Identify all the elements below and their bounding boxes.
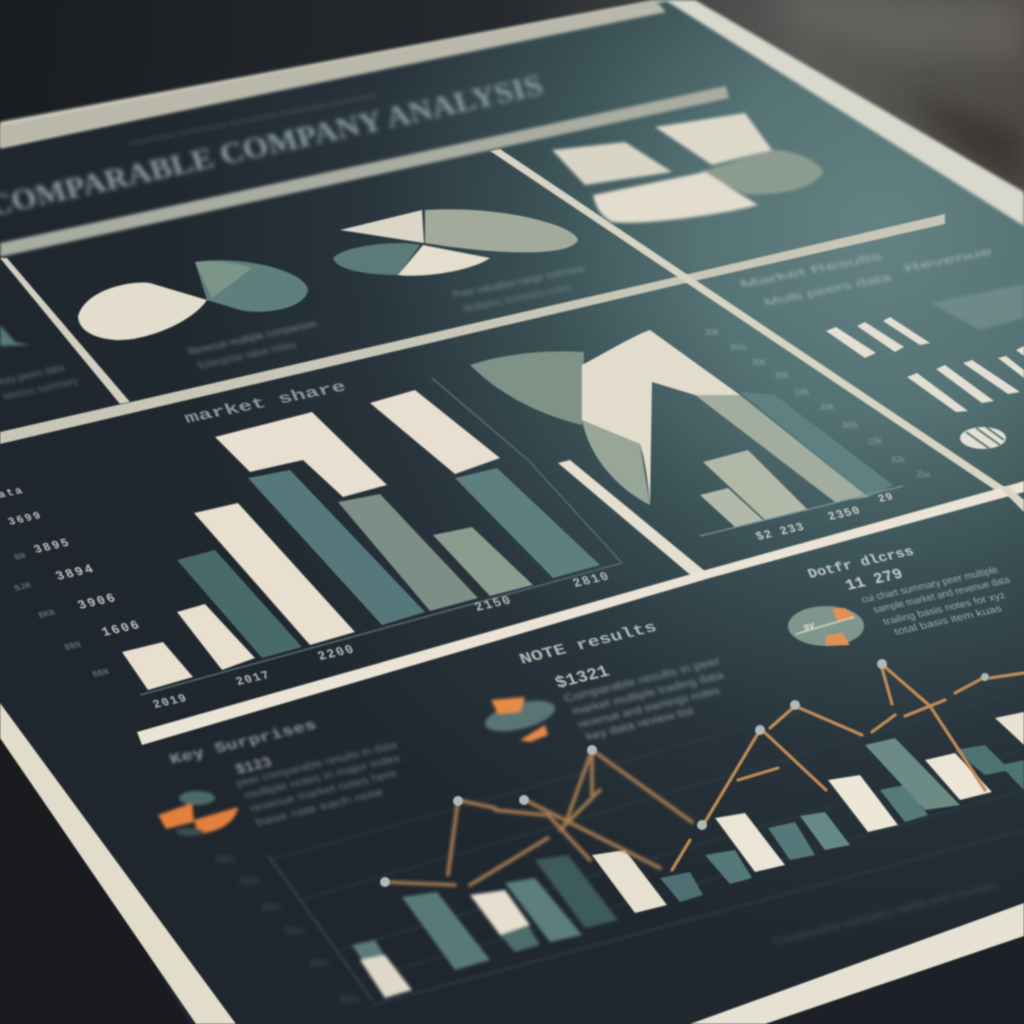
diagonal axis labels: 30% [730,343,746,352]
paragraph: key data review list [584,706,696,743]
y axis labels: 1606 [99,617,144,640]
x axis labels: 2019 [151,691,191,712]
value: $123 [234,755,275,779]
icon: sage orange badge right [788,606,864,646]
gridlines [270,650,1024,980]
diagonal axis labels: Zxx [917,470,930,479]
heading: Key Surprises [168,718,320,769]
panel: left pie chart: Enterprise value notes [196,340,298,372]
line series [380,659,1024,887]
stat text rows: Multi peers data [762,272,895,309]
panel: key results heading and text [517,619,727,743]
chart value labels: $2 233 [754,520,808,544]
stat text rows: Market Results [738,251,885,291]
diagonal axis labels: 30% [842,421,858,430]
diagonal axis labels: 10K [795,388,810,397]
axis [268,855,372,1000]
y axis labels: BBN [63,640,83,653]
bars [122,390,600,690]
axis labels: BBN [240,876,259,886]
y axis labels [0,485,144,680]
y axis labels: 3895 [32,536,73,557]
icon: striped circle [960,427,1006,449]
axis labels [216,854,359,1004]
panel: area and arch chart [470,328,930,544]
axis [140,378,622,695]
panel: combined bar and line chart [216,650,1024,1005]
heading: key results: NOTE results [517,619,660,669]
stat text rows: Revenue [902,246,995,275]
y axis labels: BBN [91,667,111,680]
y axis labels: BN [13,551,28,563]
panel: top right pie chart [552,113,823,223]
icon: orange badge left [158,791,238,836]
x axis labels [151,569,613,712]
y axis labels: 3894 [53,561,98,584]
axis labels: BBN [340,994,359,1004]
paragraph: market multiple trading data [570,669,727,718]
y axis labels: 3699 [6,510,45,529]
paragraph: total basis item kuas [892,604,1004,638]
chart value labels [754,491,897,544]
nodes [380,659,989,887]
panel: left pie chart: Revenue multiple comparison [186,319,319,358]
diagonal axis labels: 30K [752,358,767,367]
x axis labels: 2810 [570,569,613,591]
panel: far left sliver: Metrics summary [1,376,80,403]
value: $1321 [552,662,613,693]
x axis labels: 2017 [234,668,274,689]
axis labels: BBN [310,958,329,968]
panel: profit drivers text [806,544,1013,638]
paragraph [562,655,727,743]
orange line right [672,667,1024,870]
paragraph: peer comparable results in data [234,739,400,790]
diagonal axis labels [705,328,930,479]
axis labels: BBN [285,926,304,936]
panel: small horizontal bars [826,317,1024,412]
panel: far left sliver [0,325,80,403]
panel: center pie chart: Multiples summary notes [461,283,573,315]
paragraph [234,739,403,829]
diagonal axis labels: £2x [892,455,905,464]
bottom caption text: Comparable company notes and sources [771,879,1000,948]
diagonal axis labels: 30K [775,371,790,380]
orange line left [385,750,692,885]
paragraph: revenue and earnings notes [576,685,722,731]
paragraph: Comparable results in peer [562,655,723,705]
bars [352,855,618,998]
heading: Dotfr dlcrss [806,544,917,583]
y axis labels: 3906 [75,590,120,613]
stat text rows [738,246,995,309]
x axis labels: 2200 [315,642,358,664]
chart value labels: 2350 [826,504,864,524]
paragraph: sample market and revenue data [871,575,1013,616]
diagonal axis labels: 30K [820,403,835,412]
panel: left key stats text [168,718,403,829]
value: 11 279 [843,566,906,595]
axis labels: BBN [262,902,281,912]
x axis labels: 2150 [472,593,515,615]
paragraph: cui chart summary peer multiple [859,565,1001,606]
panel: center pie chart: Peer valuation range overview [451,264,587,301]
axis labels: BBN [216,854,235,864]
icon: orange teal badge center [482,695,558,742]
icon: sage orange badge right: 9V [803,621,816,634]
panel frame lines [0,86,1024,745]
y axis labels: BKN [37,608,57,621]
heading: market share: market share [182,378,349,428]
panel: left pie chart [78,260,319,372]
diagonal axis labels: 12K [868,437,883,446]
paragraph: multiple notes in major index [242,752,403,802]
paragraph: revenue market notes here [248,768,399,815]
chart value labels: 29 [876,491,897,506]
diagonal axis labels: 30K [705,328,720,337]
paragraph: base rate each note [254,787,385,829]
panel: center pie chart [333,209,587,315]
subtitle strip: ———— ———— ———— ———— ———— [126,86,378,150]
panel: market share bar chart [0,378,622,712]
y axis labels: BJM [13,581,33,594]
paragraph [859,565,1013,638]
paragraph: trailing basis notes for xyz [881,590,1008,628]
panel: top right stats [738,246,1024,330]
